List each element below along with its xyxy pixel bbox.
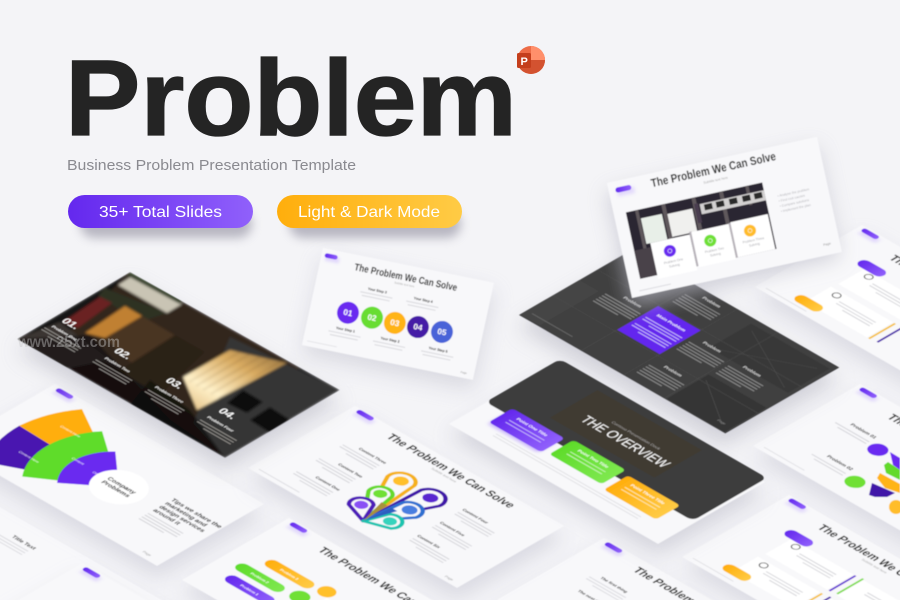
slide: bottom partial title: The first thing bbox=[599, 576, 630, 594]
slide: title text fragment bottom left: Title Text bbox=[10, 535, 37, 551]
item 01: 01. bbox=[58, 317, 83, 331]
fan chart: Content bbox=[70, 457, 85, 465]
fan chart: Other bbox=[91, 471, 103, 478]
card: purple: Problem One bbox=[663, 257, 684, 265]
side text: around it bbox=[151, 508, 182, 526]
pills: Problem 1 bbox=[239, 584, 261, 596]
slide title: The Problem We Can Solve bbox=[383, 432, 519, 510]
slide: peacock petal infographic: Page bbox=[443, 575, 454, 581]
fan chart: Problems bbox=[99, 480, 132, 499]
problem blocks: Problem bbox=[701, 296, 722, 308]
problem blocks: Problem bbox=[701, 341, 723, 353]
content right: Content Four bbox=[461, 508, 490, 525]
badge: 35+ Total Slides bbox=[68, 195, 253, 238]
side text: design services bbox=[157, 505, 207, 534]
card: green bbox=[691, 224, 736, 267]
upper step labels: Your Step 3 bbox=[367, 287, 387, 295]
pills bbox=[217, 549, 378, 600]
bullet list: • Analyse the problem bbox=[777, 187, 810, 198]
content right: Content Five bbox=[438, 521, 467, 537]
badge: Light & Dark Mode bbox=[277, 195, 462, 238]
marker pill bbox=[615, 184, 635, 197]
card: yellow bbox=[730, 214, 775, 257]
problem blocks: Problem bbox=[622, 296, 643, 308]
marker pill bbox=[51, 388, 77, 403]
fan chart: Company bbox=[105, 476, 138, 495]
item 04: Problem Four bbox=[206, 416, 236, 433]
slide: dark six-problem map: Page bbox=[716, 419, 727, 425]
step circles: 02 bbox=[367, 313, 378, 323]
content left: Content One bbox=[314, 476, 342, 492]
photo bbox=[626, 182, 777, 279]
item 01 bbox=[38, 315, 102, 352]
dark banner bbox=[486, 359, 767, 521]
pills: Problem 3 bbox=[279, 568, 301, 581]
bullet list bbox=[777, 187, 813, 213]
card: yellow: Problem Three bbox=[742, 236, 765, 245]
upper step labels: Your Step 4 bbox=[413, 296, 433, 304]
item 02 bbox=[89, 346, 156, 384]
content left: Content Two bbox=[337, 463, 365, 479]
slide: bottom partial title bbox=[495, 538, 813, 600]
slide: peach steps partial with pills bbox=[180, 518, 498, 600]
content left bbox=[290, 440, 389, 497]
slide: three solutions with photo bbox=[607, 137, 842, 308]
upper step labels: Your Step 2 bbox=[380, 336, 400, 344]
bullet list: • Implement the plan bbox=[780, 203, 811, 213]
problem blocks bbox=[553, 266, 812, 416]
card: point one bbox=[486, 408, 565, 454]
slide: right top two-card layout bbox=[755, 225, 900, 419]
slide: company problems fan chart bbox=[0, 384, 264, 578]
step circles: 05 bbox=[436, 327, 448, 338]
slide: five numbered steps: Page bbox=[460, 370, 468, 375]
side text: Tips we share the bbox=[169, 498, 224, 530]
badge: Light & Dark Mode: Light & Dark Mode bbox=[298, 204, 440, 221]
card: green: Problem Two bbox=[704, 246, 724, 254]
photo: building facade bbox=[60, 272, 300, 420]
card: yellow: Solving bbox=[749, 242, 760, 248]
peacock petals bbox=[337, 469, 452, 536]
card: green: Solving bbox=[710, 251, 721, 258]
slide: company problems fan chart: Page bbox=[141, 550, 152, 557]
content right: Content Six bbox=[416, 534, 442, 549]
icon: PowerPoint logo bbox=[517, 46, 545, 74]
content left: Content Three bbox=[357, 447, 388, 465]
upper step labels bbox=[335, 282, 458, 354]
slide: title text fragment bottom left bbox=[0, 490, 179, 600]
slide: five numbered steps: Subtitle text here bbox=[394, 280, 415, 288]
card: point three bbox=[604, 475, 680, 520]
watermark: www.25xt.com bbox=[17, 334, 120, 351]
step circles bbox=[335, 300, 455, 345]
marker pill bbox=[324, 253, 340, 264]
step circles: 01 bbox=[343, 308, 354, 318]
item 03 bbox=[141, 376, 208, 414]
upper step labels: Your Step 1 bbox=[335, 326, 355, 334]
content right bbox=[406, 508, 502, 563]
slide: right lower two-card layout: Subtitle text here bbox=[860, 558, 888, 574]
bullet list: • Compare solutions bbox=[779, 198, 810, 208]
badge: 35+ Total Slides: 35+ Total Slides bbox=[99, 204, 222, 221]
problem blocks: Problem bbox=[741, 365, 763, 377]
item 02: Problem Two bbox=[103, 357, 132, 373]
title: Problem: Problem bbox=[65, 37, 517, 158]
slide: dark six-problem map bbox=[517, 249, 839, 446]
card: point two: Point Two Title bbox=[576, 449, 610, 469]
slide: peacock petal infographic: Subtitle text here bbox=[430, 467, 458, 483]
overview body lines bbox=[493, 433, 641, 519]
item 04 bbox=[194, 406, 260, 444]
slide: five numbered steps bbox=[302, 248, 494, 390]
card: purple: Solving bbox=[669, 262, 680, 269]
card: point three: Point Three Title bbox=[629, 484, 667, 505]
centre purple card: Main Problem bbox=[655, 314, 687, 332]
step description lines bbox=[327, 287, 463, 361]
slide: peacock petal infographic bbox=[248, 406, 564, 600]
item 04: 04. bbox=[215, 407, 239, 421]
item 03: 03. bbox=[162, 377, 186, 391]
problem 02 bbox=[802, 449, 874, 490]
slide: the overview: THE OVERVIEW bbox=[576, 414, 674, 470]
side text: marketing and bbox=[163, 501, 209, 528]
item 02: 02. bbox=[110, 347, 135, 361]
card: point one: Point One Title bbox=[515, 417, 549, 437]
problem blocks: Problem bbox=[662, 365, 683, 377]
icon: PowerPoint logo: P bbox=[520, 56, 528, 68]
slide: right funnel layout bbox=[753, 384, 900, 578]
banner heading: Contoso Presentation Deck bbox=[610, 421, 663, 451]
slide: three solutions with photo: Page bbox=[823, 241, 831, 247]
upper step labels: Your Step 5 bbox=[428, 346, 448, 354]
subtitle: Business Problem Presentation Template bbox=[67, 157, 356, 174]
centre purple card bbox=[617, 306, 701, 354]
item 01: Problem One bbox=[50, 325, 79, 341]
funnel bbox=[869, 452, 900, 514]
problem 01 bbox=[826, 417, 897, 458]
card: point two bbox=[549, 440, 626, 484]
step circles: 03 bbox=[389, 318, 401, 329]
slide: right lower two-card layout bbox=[682, 495, 900, 600]
slide title: The Problem We Can Solve bbox=[650, 149, 777, 190]
problem 02: Problem 02 bbox=[825, 455, 854, 472]
item 03: Problem Three bbox=[154, 386, 186, 404]
slide: the overview bbox=[449, 359, 767, 556]
pills: Problem 2 bbox=[249, 572, 271, 584]
step circles: 04 bbox=[412, 322, 424, 333]
fan chart: Content Here bbox=[59, 425, 82, 438]
side text bbox=[138, 498, 224, 547]
fan chart bbox=[0, 399, 190, 526]
fan chart: Content Here bbox=[17, 451, 40, 464]
slide title: The Problem We Can Solve bbox=[353, 262, 459, 294]
problem 01: Problem 01 bbox=[848, 423, 878, 440]
slide: photo with four problems bbox=[17, 272, 340, 470]
card: purple bbox=[650, 234, 697, 279]
slide: three solutions with photo: Subtitle text here bbox=[703, 176, 729, 185]
slide: lower left partial bbox=[0, 563, 291, 600]
bullet list: • Find root causes bbox=[778, 193, 806, 203]
